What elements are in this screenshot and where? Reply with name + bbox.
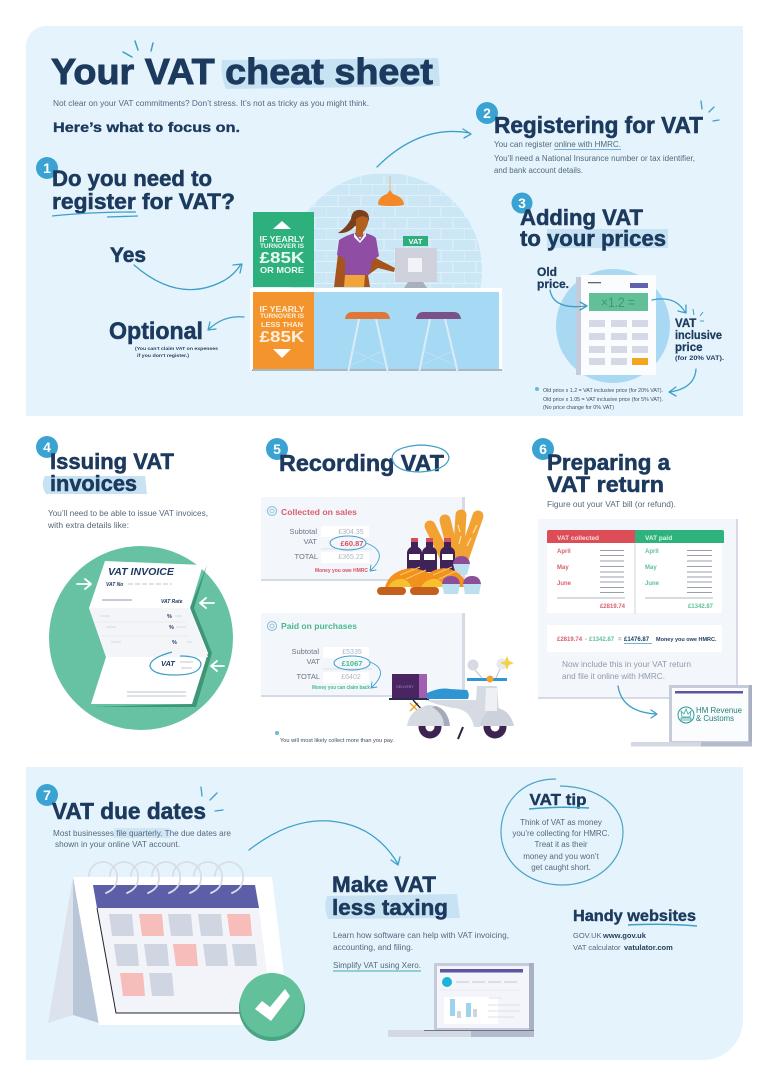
illustration: cafe counter (250, 173, 502, 373)
section: make VAT less taxing (325, 872, 534, 1037)
heading 7: VAT due dates (52, 798, 206, 824)
badge 5 (266, 438, 288, 460)
arrow to section 2 (377, 129, 471, 167)
heading 2: Registering for VAT (494, 112, 703, 138)
badge 4 (36, 436, 58, 458)
invoice document: VAT (161, 659, 176, 668)
badge 3: 3 (518, 195, 526, 211)
text: file online (562, 660, 691, 681)
bottom panel background (26, 767, 743, 1060)
illustration: bakery goods (377, 515, 481, 595)
card: paid on purchases: VAT (307, 657, 320, 666)
badge 2: 2 (483, 105, 491, 121)
buns (377, 567, 468, 595)
heading 5: Recording VAT (279, 450, 444, 476)
table: VAT collected and paid: May (645, 565, 657, 571)
handy websites: Handy websites (573, 908, 696, 925)
badge 6 (532, 438, 554, 460)
label: VAT inclusive price: inclusive (675, 330, 722, 342)
callout: VAT tip: Think of VAT as money (520, 818, 602, 827)
card: collected on sales: Collected on sales (281, 507, 357, 517)
callout: VAT tip: VAT tip (530, 792, 587, 809)
text 4: with extra details like: (47, 521, 129, 530)
invoice document (89, 561, 212, 707)
body text: accounting, and filing. (333, 943, 413, 952)
text 7: shown in your online VAT account. (55, 840, 180, 849)
invoice document: VAT No (106, 582, 123, 588)
turnover box: 85k or more: TURNOVER IS (260, 244, 304, 250)
label: VAT inclusive price: VAT (675, 318, 696, 330)
optional note: (You can’t claim VAT on expenses (135, 346, 218, 351)
invoice document: % (169, 625, 174, 631)
note: VAT formulas: Old price x 1.05 = VAT inclusive price (for 5% VAT). (543, 397, 663, 403)
scooter body (407, 686, 514, 739)
card: paid on purchases: Subtotal (291, 647, 319, 656)
table: VAT collected and paid (547, 530, 724, 614)
label: old price: price. (537, 277, 569, 291)
heading 6 (547, 450, 671, 497)
wheels (418, 716, 506, 738)
turnover box: less than 85k: LESS THAN (261, 320, 303, 329)
handy websites: vatulator.com (624, 943, 673, 952)
handy websites: VAT calculator (573, 943, 621, 952)
card: collected on sales: Subtotal (289, 527, 317, 536)
badge 4: 4 (43, 439, 51, 455)
callout: VAT tip: get caught short. (531, 863, 591, 872)
section 3: adding VAT (512, 192, 724, 411)
arrow: to note (669, 369, 696, 396)
turnover box: 85k or more (253, 212, 314, 287)
badge 1 (36, 157, 58, 179)
turnover box: less than 85k: IF YEARLY (260, 305, 305, 314)
turnover box: less than 85k (253, 292, 314, 369)
calculation box: £1476.87 (624, 637, 650, 643)
turnover box: less than 85k: £85K (260, 329, 305, 346)
subheading: Here’s what to focus on. (53, 119, 240, 135)
table: VAT collected and paid: June (645, 581, 660, 587)
text 4: You’ll need to be able to issue VAT invoices, (48, 509, 208, 518)
text 6: Figure out your VAT bill (or refund). (547, 500, 676, 509)
check badge (239, 973, 305, 1041)
brick dome (290, 174, 482, 288)
invoice document: VAT INVOICE (108, 567, 174, 578)
calculation box: £2819.74 (557, 637, 583, 643)
arrow: optional (208, 317, 244, 330)
note: VAT formulas: Old price x 1.2 = VAT inclusive price (for 20% VAT). (543, 388, 663, 394)
heading 4 (43, 449, 175, 496)
handy websites: GOV.UK (573, 931, 601, 940)
baguettes (430, 515, 478, 562)
handlebars (467, 656, 514, 682)
calendar stand (48, 877, 73, 1023)
top panel background (26, 26, 743, 416)
handy websites (573, 908, 697, 952)
upper muffin (453, 556, 470, 575)
date cells (109, 914, 257, 996)
section 4: issuing invoices (36, 436, 233, 730)
card: collected on sales: TOTAL (295, 552, 318, 561)
text: file online: Now include this in your VAT return (562, 660, 691, 669)
calculation box: Money you owe HMRC. (656, 637, 717, 643)
text 4 (47, 509, 208, 530)
note: VAT formulas: (No price change for 0% VAT) (543, 405, 614, 411)
counter (250, 288, 502, 371)
heading 3: to your prices (520, 226, 666, 251)
card: paid on purchases: TOTAL (297, 672, 320, 681)
card: paid on purchases: Money you can claim back (312, 685, 370, 691)
heading 6: VAT return (547, 472, 664, 497)
turnover box: less than 85k: TURNOVER IS (260, 314, 304, 320)
heading: less taxing (332, 895, 448, 920)
heading 7 (52, 787, 223, 824)
card: collected on sales: Money you owe HMRC (315, 568, 368, 574)
section 5: recording VAT (261, 438, 514, 744)
calculation box: - (585, 637, 587, 643)
label: old price: Old (537, 265, 557, 279)
calculator: ×1.2 = (601, 294, 635, 310)
calculation box: £1342.87 (589, 637, 615, 643)
heading 1 (52, 166, 235, 217)
card: paid on purchases (261, 613, 465, 697)
section 6: preparing a VAT return (532, 438, 752, 746)
heading 3 (520, 205, 668, 251)
till: VAT (409, 237, 423, 246)
invoice document: VAT Rate (161, 599, 183, 605)
label: VAT inclusive price: price (675, 342, 702, 354)
body text: Simplify VAT using Xero. (333, 961, 421, 970)
label: VAT inclusive price: (for 20% VAT). (675, 355, 724, 362)
yes label: Yes (110, 244, 146, 267)
note: VAT formulas (535, 387, 663, 411)
card: paid on purchases: £1067 (342, 659, 362, 668)
calendar page (73, 877, 290, 1025)
laptop: HMRC: & Customs (696, 714, 734, 723)
badge 1: 1 (43, 160, 51, 176)
card: paid on purchases: £5335 (342, 649, 362, 656)
scooter seat (427, 688, 469, 699)
calendar (48, 862, 305, 1041)
text 2: You’ll need a National Insurance number or tax identifier, (494, 154, 695, 163)
card: paid on purchases: £6402 (341, 674, 361, 681)
card: collected on sales: £365.22 (338, 554, 364, 561)
till (395, 236, 437, 288)
heading 2 (494, 101, 719, 138)
badge 6: 6 (539, 441, 547, 457)
heading 3: Adding VAT (520, 205, 644, 230)
card: VAT return (538, 519, 738, 699)
heading: Make VAT (332, 872, 437, 897)
table: VAT collected and paid: June (557, 581, 572, 587)
table: VAT collected and paid: April (645, 549, 659, 555)
text 7 (53, 828, 232, 849)
label: VAT inclusive price (675, 309, 724, 362)
card: collected on sales: £304.35 (338, 529, 364, 536)
table: VAT collected and paid: VAT collected (557, 535, 599, 542)
text: file online: and file it online with HMRC. (562, 672, 665, 681)
stool: purple (416, 312, 461, 373)
laptop: HMRC: HM Revenue (696, 706, 743, 715)
calculation box (547, 625, 722, 652)
badge 7 (36, 784, 58, 806)
table: VAT collected and paid: £2819.74 (600, 604, 626, 610)
bottles (407, 538, 455, 572)
invoice circle (49, 546, 233, 730)
heading 4: invoices (50, 471, 137, 496)
lower muffins (442, 576, 481, 594)
text 7: Most businesses file quarterly. The due dates are (53, 829, 232, 838)
intro text: Not clear on your VAT commitments? Don’t stress. It’s not as tricky as you might think. (53, 99, 369, 108)
card: collected on sales: VAT (304, 537, 317, 546)
handy websites: www.gov.uk (602, 931, 647, 940)
body text: Learn how software can help with VAT invoicing, (333, 931, 509, 940)
card: paid on purchases: Paid on purchases (281, 621, 357, 631)
turnover box: 85k or more: £85K (260, 250, 305, 267)
calculation box: = (618, 637, 622, 643)
heading 1: register for VAT? (52, 189, 235, 214)
optional note (135, 346, 218, 358)
turnover box: 85k or more: IF YEARLY (260, 235, 305, 244)
table: VAT collected and paid: VAT paid (645, 535, 672, 542)
heading (325, 872, 460, 920)
section 7: VAT due dates (36, 784, 305, 1041)
arrow: yes (134, 264, 242, 290)
calculator (556, 269, 670, 383)
label: old price (537, 265, 569, 291)
text 2: and bank account details. (494, 166, 583, 175)
arrow: old price (550, 290, 587, 310)
arrow: result (652, 299, 686, 313)
note: collect vs pay: You will most likely collect more than you pay. (280, 738, 394, 744)
section 2: registering (476, 101, 719, 175)
invoice document: % (167, 614, 172, 620)
heading 4: Issuing VAT (50, 449, 175, 474)
badge 7: 7 (43, 787, 51, 803)
body text (333, 931, 509, 971)
text 2 (494, 140, 695, 175)
badge 2 (476, 102, 498, 124)
text 2: You can register online with HMRC. (494, 140, 621, 149)
badge 5: 5 (273, 441, 281, 457)
table: VAT collected and paid: April (557, 549, 571, 555)
arrows: invoice details (77, 579, 224, 671)
note: collect vs pay (275, 731, 394, 744)
pendant lamp (378, 176, 404, 206)
stool: orange (345, 312, 390, 373)
callout: VAT tip: you’re collecting for HMRC. (512, 829, 610, 838)
laptop: HMRC (631, 685, 752, 746)
arrow: to HMRC (618, 686, 657, 718)
callout: VAT tip: money and you won’t (523, 852, 600, 861)
illustration: delivery scooter (389, 656, 514, 739)
table: VAT collected and paid: £1342.87 (688, 604, 714, 610)
callout: VAT tip: Treat it as their (534, 840, 588, 849)
arrow to make VAT less taxing (249, 821, 400, 865)
calendar rings (89, 862, 243, 893)
badge 3 (512, 192, 532, 214)
optional label: Optional (109, 318, 203, 345)
woman (334, 210, 395, 287)
heading 6: Preparing a (547, 450, 671, 475)
laptop: software (388, 963, 534, 1037)
card: collected on sales: £60.87 (341, 539, 363, 548)
turnover box: 85k or more: OR MORE (260, 265, 304, 275)
section 1: do you need to register (36, 157, 244, 358)
delivery box: DELIVERY (396, 685, 414, 689)
table: VAT collected and paid: May (557, 565, 569, 571)
callout: VAT tip (501, 779, 623, 885)
heading 1: Do you need to (52, 166, 212, 191)
card: collected on sales (261, 497, 465, 581)
title: Your VAT cheat sheet (51, 51, 433, 92)
invoice document: % (172, 640, 177, 646)
optional note: if you don’t register.) (137, 353, 190, 358)
